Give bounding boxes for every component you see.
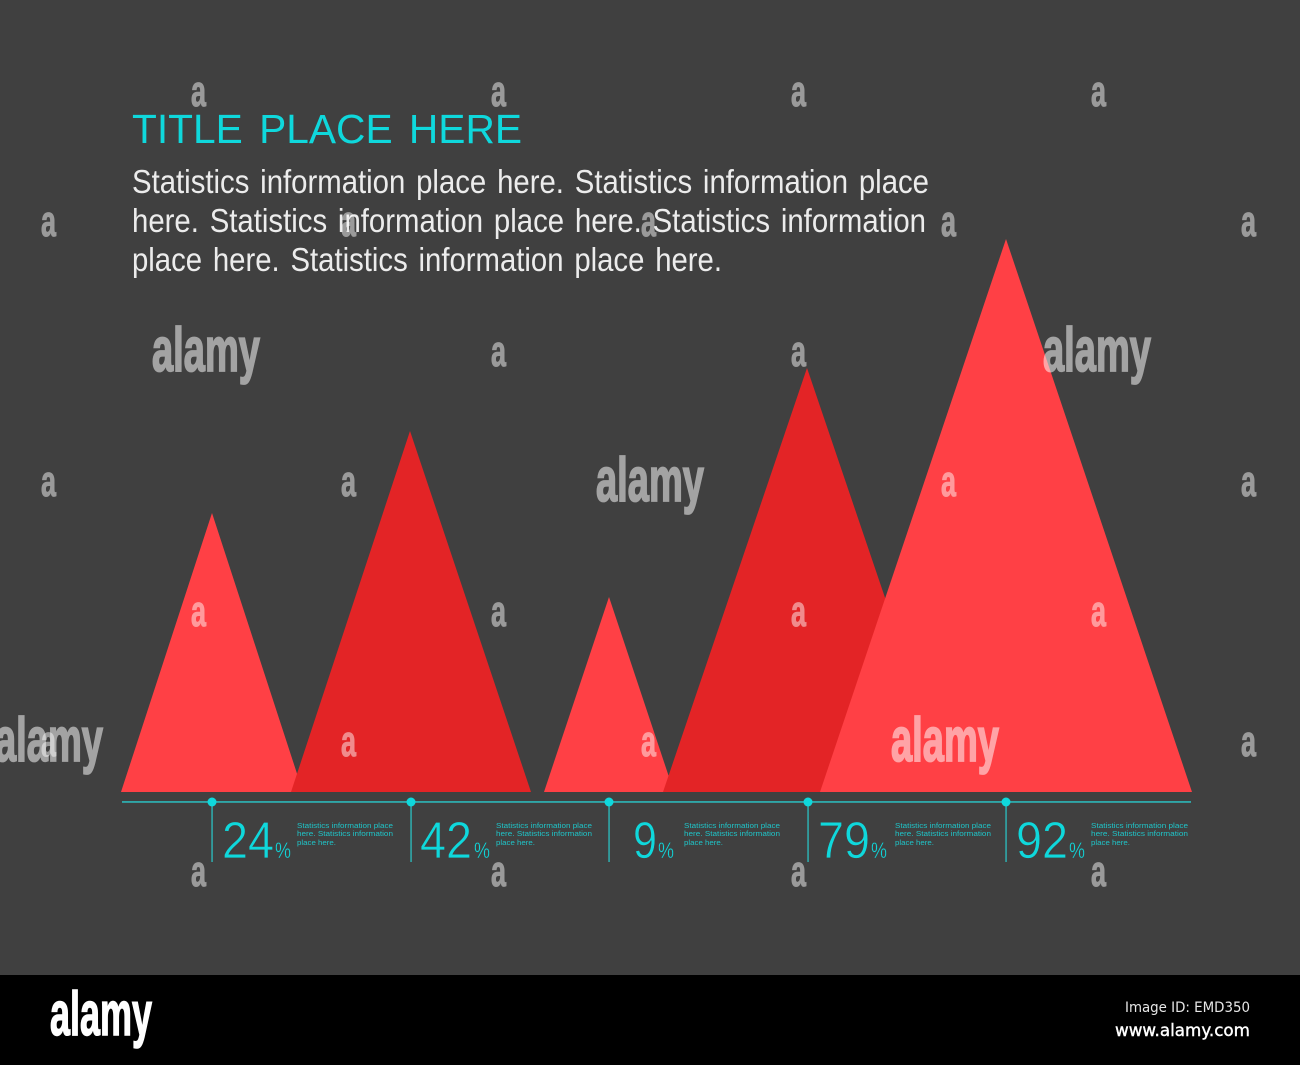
stat: 24%: here. Statistics information [297,829,393,838]
watermark: small letters: a [491,847,506,896]
stat: 42%: place here. [496,838,535,847]
watermark: small letters: a [1091,587,1106,636]
watermark: small letters: a [191,67,206,116]
stat: 42%: here. Statistics information [496,829,592,838]
watermark: small letters: a [791,587,806,636]
watermark: small letters: a [941,457,956,506]
stat: 79% [818,812,991,870]
triangle: 42% [291,431,531,792]
watermark: small letters: a [1091,67,1106,116]
intro text block [132,163,929,278]
axis with markers [122,798,1191,862]
stat: 79%: Statistics information place [895,821,991,830]
stat: 24%: 24 [222,812,274,870]
watermark: small letters: a [1241,457,1256,506]
watermark: small letters: a [641,717,656,766]
watermark: large words: alamy [596,446,704,515]
stat: 42%: Statistics information place [496,821,592,830]
stat: 92%: here. Statistics information [1091,829,1188,838]
stat: 24%: % [275,838,291,863]
watermark: small letters: a [1091,847,1106,896]
stat: 92%: 92 [1016,812,1068,870]
stat: 9%: Statistics information place [684,821,780,830]
watermark: small letters: a [1241,717,1256,766]
watermark: large words [0,316,1151,775]
footer bar [0,975,1300,1065]
watermark: large words: alamy [0,706,103,775]
stat: 79%: here. Statistics information [895,829,991,838]
watermark: small letters: a [791,847,806,896]
stat: 92%: Statistics information place [1091,821,1188,830]
stat: 9%: 9 [633,812,657,870]
stat: 92%: place here. [1091,838,1130,847]
stat: 79%: 79 [818,812,870,870]
triangle: 24% [121,513,303,792]
stat: 92%: % [1069,838,1085,863]
watermark: small letters: a [341,457,356,506]
stat: 79%: % [871,838,887,863]
watermark: small letters: a [341,717,356,766]
watermark: small letters: a [491,587,506,636]
intro text block: here. Statistics information place here. Statistics information [132,202,926,239]
triangle: 92% [820,239,1192,792]
stat: 9% [633,812,780,870]
watermark: small letters: a [341,197,356,246]
watermark: small letters: a [791,327,806,376]
stat: 42% [420,812,592,870]
image id: Image ID: EMD350 [1125,1000,1250,1016]
stat: 92% [1016,812,1188,870]
triangle: 9% [544,597,674,792]
stat: 9%: % [658,838,674,863]
title: TITLE PLACE HERE [132,106,522,152]
watermark: small letters: a [491,327,506,376]
stat: 9%: place here. [684,838,723,847]
watermark: small letters: a [191,587,206,636]
triangle chart [121,239,1192,792]
watermark: small letters: a [191,847,206,896]
stat: 9%: here. Statistics information [684,829,780,838]
stat: 24%: place here. [297,838,336,847]
stat: 79%: place here. [895,838,934,847]
watermark: small letters: a [941,197,956,246]
watermark: large words: alamy [891,706,999,775]
watermark: small letters [41,67,1256,896]
stat: 24%: Statistics information place [297,821,393,830]
watermark: small letters: a [641,197,656,246]
watermark: small letters: a [1241,197,1256,246]
watermark: small letters: a [41,197,56,246]
intro text block: Statistics information place here. Statistics information place [132,163,929,200]
triangle: 79% [663,368,951,792]
watermark: small letters: a [491,67,506,116]
watermark: large words: alamy [1043,316,1151,385]
watermark: small letters: a [41,457,56,506]
intro text block: place here. Statistics information place here. [132,241,722,278]
website: www.alamy.com [1115,1021,1250,1040]
stat: 42%: 42 [420,812,472,870]
watermark: small letters: a [791,67,806,116]
watermark: small letters: a [41,717,56,766]
stat: 42%: % [474,838,490,863]
watermark: large words: alamy [152,316,260,385]
footer logo: alamy [50,980,152,1049]
stat: 24% [222,812,393,870]
